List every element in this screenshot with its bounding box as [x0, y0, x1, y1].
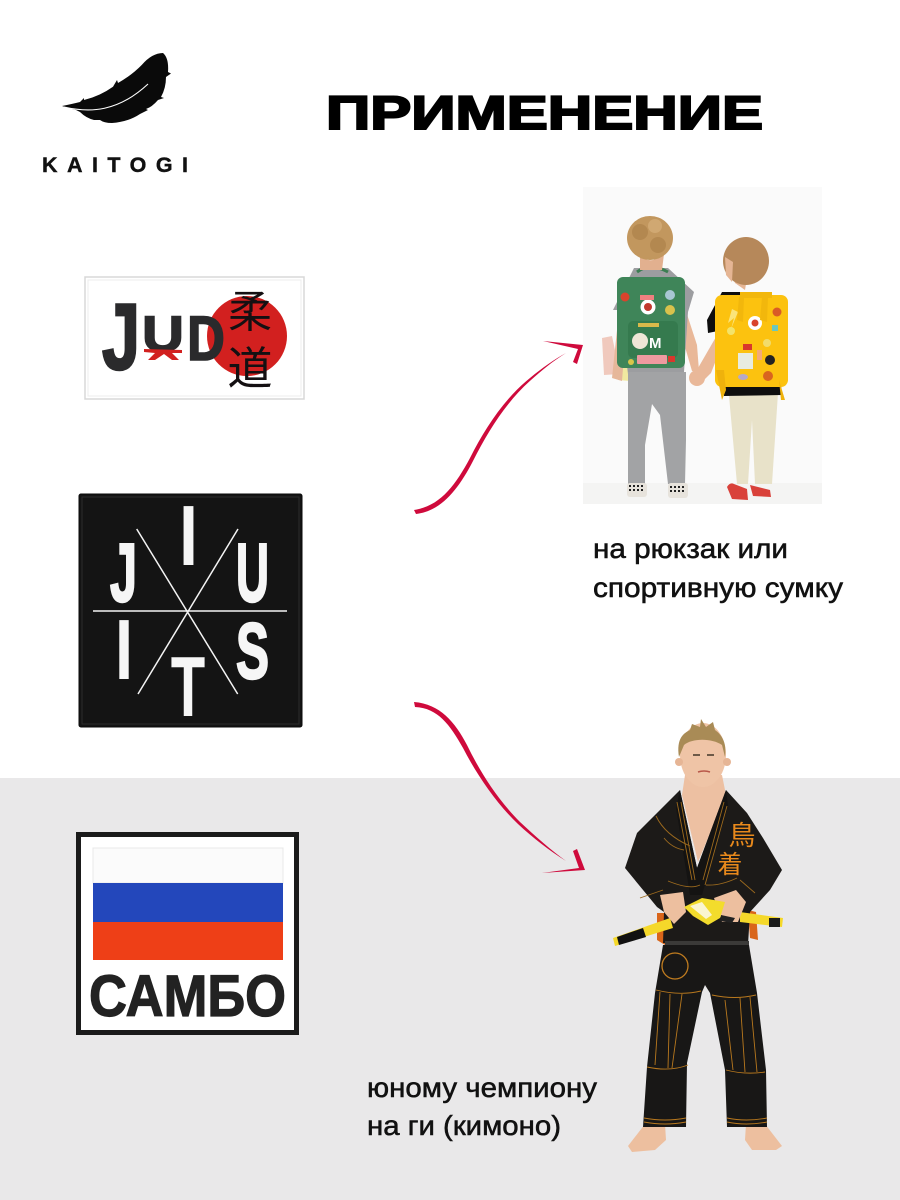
caption: backpack: [593, 533, 843, 603]
patch: judo: D: [187, 304, 225, 374]
arrow: jiu jitsu to gi: [414, 702, 585, 873]
kanji: 柔: [228, 288, 272, 337]
caption: backpack: на рюкзак или: [593, 533, 788, 564]
patch: judo: 道: [227, 343, 273, 394]
patch: jiu jitsu: [79, 489, 302, 734]
orange jacket trim: [657, 910, 758, 945]
caption: gi: юному чемпиону: [367, 1072, 597, 1103]
letters: I: [115, 603, 133, 698]
feet: [628, 1124, 666, 1152]
photo: boy in black gi: 着: [717, 851, 743, 879]
boy left: M: [649, 335, 662, 352]
boy left: [602, 216, 699, 498]
jacket hem: [665, 941, 749, 945]
letters: T: [171, 640, 205, 734]
letters: J: [110, 526, 137, 619]
crossed lines: [93, 529, 287, 694]
letters: [110, 489, 269, 734]
letters: U: [236, 526, 269, 619]
logo: Kaitogi feather and wordmark: [42, 53, 188, 177]
belt knot: [684, 898, 725, 925]
pants: [643, 945, 767, 1127]
letters: I: [179, 489, 198, 584]
hands: [660, 892, 686, 924]
belt: [613, 918, 673, 946]
caption: gi: на ги (кимоно): [367, 1110, 561, 1141]
letters: S: [236, 606, 269, 695]
arrow: jiu jitsu to backpack: [414, 341, 583, 514]
lapel: [676, 790, 728, 895]
joined hands: [689, 370, 705, 386]
gi kanji: 鳥: [728, 821, 756, 851]
grey lower panel: [0, 778, 900, 1200]
caption: gi: [367, 1072, 597, 1141]
photo: two kids with backpacks: [583, 187, 822, 504]
title: ПРИМЕНЕНИЕ: [326, 86, 763, 139]
yellow backpack: [715, 295, 788, 387]
flag: [93, 848, 283, 960]
caption: backpack: спортивную сумку: [593, 572, 843, 603]
green backpack: [617, 277, 685, 368]
red sun: [207, 296, 287, 376]
JUD lettering: J: [102, 284, 140, 389]
red belt: [144, 349, 182, 360]
sambo lettering: САМБО: [89, 964, 286, 1029]
jacket: [625, 790, 782, 945]
photo: boy in black gi: [613, 719, 783, 1152]
icon: feather: [62, 53, 171, 123]
wordmark: KAITOGI: [42, 153, 188, 177]
patch: sambo with russian flag: [78, 834, 296, 1032]
head and neck: [682, 775, 726, 862]
patch: judo: U: [142, 306, 184, 362]
patch: judo: [85, 277, 304, 399]
boy right: [694, 237, 788, 500]
